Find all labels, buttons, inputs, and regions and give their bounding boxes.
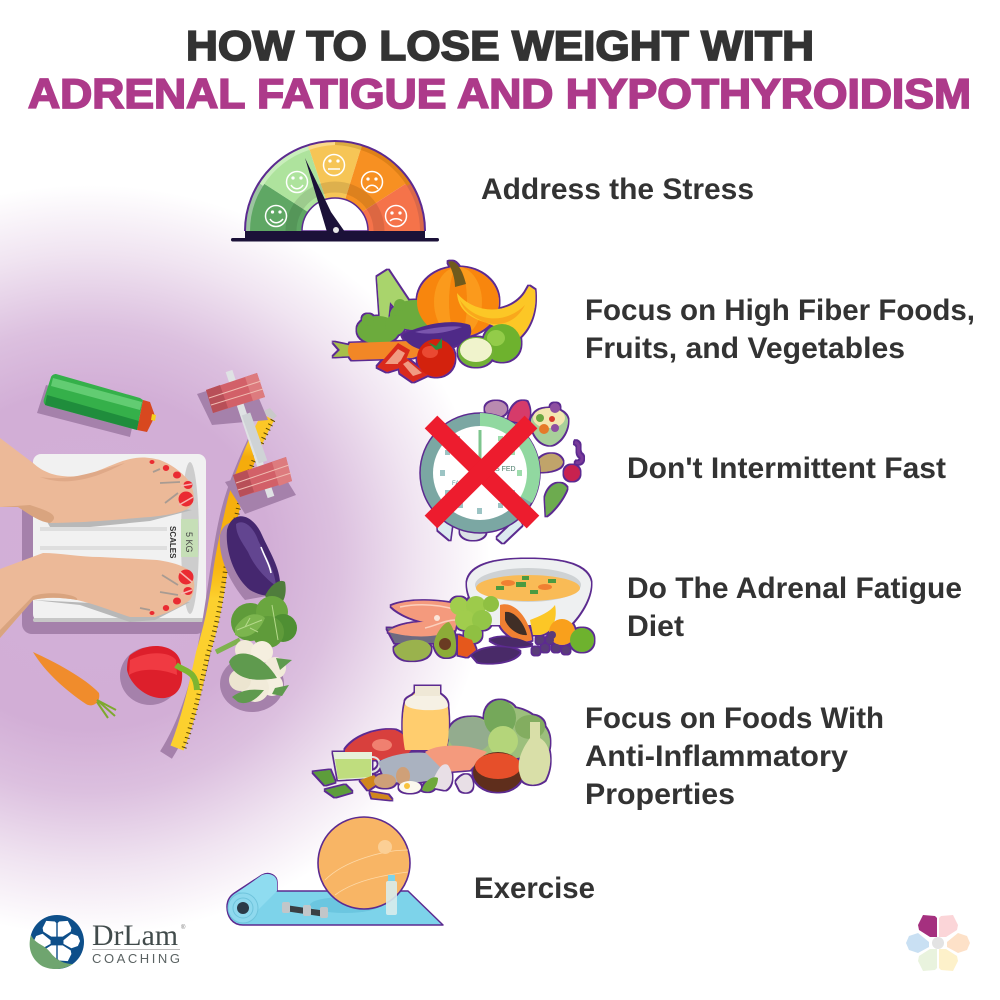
icon: clock crossed out with foods xyxy=(420,401,582,543)
wordmark: DrLam xyxy=(92,919,178,952)
label: anti-inflammatory foods xyxy=(585,702,884,811)
label: adrenal fatigue diet: Diet xyxy=(627,610,684,643)
exercise ball xyxy=(318,817,410,909)
label: intermittent fast: Don't Intermittent Fast xyxy=(627,452,946,485)
face: happy xyxy=(286,172,308,192)
icon: cabbage xyxy=(216,596,297,652)
icon: flower mark xyxy=(906,915,970,971)
icon: fruit and vegetable pile xyxy=(333,261,535,382)
icon: anti-inflammatory foods xyxy=(313,686,550,800)
small dumbbells xyxy=(282,902,328,918)
water bottle xyxy=(386,875,397,915)
icon: stress gauge xyxy=(231,141,439,242)
icon: carrot xyxy=(33,652,116,718)
face: unhappy xyxy=(386,206,406,226)
illustration: scale and healthy items xyxy=(0,371,297,755)
face: very happy xyxy=(266,206,286,226)
label: anti-inflammatory foods: Properties xyxy=(585,778,735,811)
background glow xyxy=(0,180,500,940)
foods around clock xyxy=(437,401,582,543)
icon: water bottle xyxy=(37,374,156,437)
label: adrenal fatigue diet: Do The Adrenal Fatigue xyxy=(627,572,962,605)
label: high fiber foods: Focus on High Fiber Foods, xyxy=(585,294,975,327)
label: high fiber foods: Fruits, and Vegetables xyxy=(585,332,905,365)
logo: DrLam Coaching xyxy=(30,915,186,969)
icon: adrenal fatigue diet foods xyxy=(387,559,594,663)
label: address the stress: Address the Stress xyxy=(481,173,754,206)
icon: bathroom scale: 5 KG xyxy=(184,532,194,553)
wordmark xyxy=(92,919,186,966)
clock face: S FED xyxy=(495,466,516,473)
yoga mat xyxy=(227,874,443,925)
icon: bathroom scale: SCALES xyxy=(168,526,177,559)
logo mark xyxy=(30,915,84,969)
wordmark: COACHING xyxy=(92,951,180,966)
title: HOW TO LOSE WEIGHT WITH xyxy=(186,22,814,69)
label: anti-inflammatory foods: Anti-Inflammatory xyxy=(585,740,848,773)
clock face xyxy=(420,413,540,533)
top foot xyxy=(0,438,194,527)
icon: eggplant xyxy=(220,516,286,607)
icon: red pepper xyxy=(120,646,197,705)
wordmark: ® xyxy=(181,924,186,931)
face: sad xyxy=(362,172,382,192)
icon: cauliflower xyxy=(220,640,292,712)
icon: bathroom scale xyxy=(22,454,206,634)
label: adrenal fatigue diet xyxy=(627,572,962,643)
icon: yoga mat, ball and dumbbells xyxy=(227,817,443,925)
red cross xyxy=(431,422,533,522)
icon: measuring tape xyxy=(166,408,277,755)
face: neutral xyxy=(324,154,344,176)
title: ADRENAL FATIGUE AND HYPOTHYROIDISM xyxy=(28,70,971,117)
icon: dumbbell xyxy=(197,371,296,514)
label: anti-inflammatory foods: Focus on Foods With xyxy=(585,702,884,735)
label: exercise: Exercise xyxy=(474,872,595,905)
bottom foot xyxy=(0,553,194,638)
title xyxy=(28,22,971,117)
clock face: FASTED xyxy=(452,481,476,487)
label: high fiber foods xyxy=(585,294,975,365)
